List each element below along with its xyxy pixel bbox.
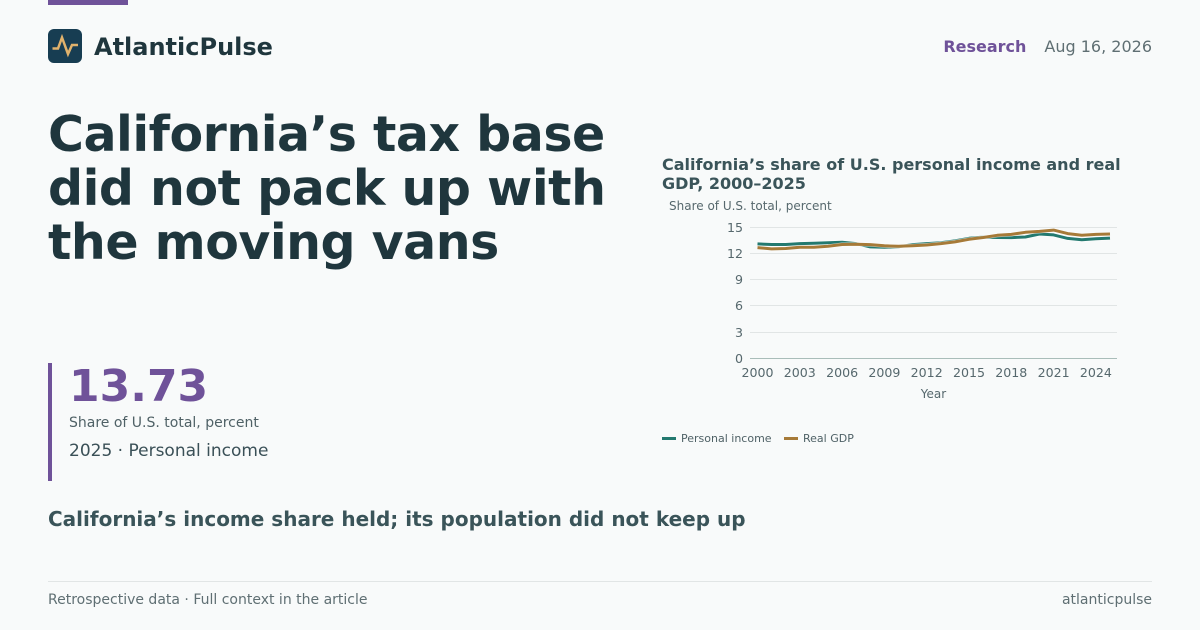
title: the moving vans bbox=[48, 214, 499, 271]
line chart bbox=[662, 199, 1117, 445]
x axis labels: 2021 bbox=[1038, 365, 1070, 380]
top accent bar bbox=[48, 0, 128, 5]
footer bbox=[48, 581, 1152, 612]
x axis labels: 2009 bbox=[868, 365, 900, 380]
line: real GDP bbox=[758, 230, 1110, 249]
chart title: GDP, 2000–2025 bbox=[662, 174, 806, 193]
x axis labels: 2012 bbox=[911, 365, 943, 380]
chart title: California’s share of U.S. personal income and real bbox=[662, 155, 1121, 174]
line: personal income bbox=[758, 234, 1110, 247]
y axis labels: 12 bbox=[727, 246, 743, 261]
x axis labels: 2006 bbox=[826, 365, 858, 380]
stat value: 13.73 bbox=[69, 361, 208, 412]
x axis labels: 2015 bbox=[953, 365, 985, 380]
y axis labels: 0 bbox=[735, 351, 743, 366]
x axis labels: 2003 bbox=[784, 365, 816, 380]
key stat callout bbox=[48, 363, 292, 481]
y axis labels: 15 bbox=[727, 220, 743, 235]
chart panel bbox=[662, 155, 1121, 445]
legend: Real GDP bbox=[803, 432, 854, 445]
stat unit: Share of U.S. total, percent bbox=[69, 415, 259, 431]
title bbox=[48, 106, 605, 271]
chart title bbox=[662, 155, 1121, 193]
legend: Personal income bbox=[681, 432, 772, 445]
x axis title: Year bbox=[920, 387, 946, 401]
brand logo and name bbox=[48, 29, 273, 63]
line chart: Share of U.S. total, percent bbox=[669, 199, 832, 213]
category and date: Research Aug 16, 2026 bbox=[943, 37, 1152, 56]
x axis labels: 2024 bbox=[1080, 365, 1112, 380]
y axis labels: 3 bbox=[735, 325, 743, 340]
brand name: AtlanticPulse bbox=[94, 33, 273, 61]
x axis labels: 2000 bbox=[741, 365, 774, 380]
stat context: 2025 · Personal income bbox=[69, 441, 268, 461]
y axis labels: 9 bbox=[735, 272, 743, 287]
y axis labels: 6 bbox=[735, 298, 743, 313]
title: did not pack up with bbox=[48, 160, 605, 217]
subheading: California’s income share held; its population did not keep up bbox=[48, 507, 746, 531]
x axis labels bbox=[741, 365, 1112, 380]
footer note: Retrospective data · Full context in the article bbox=[48, 592, 367, 608]
legend bbox=[662, 432, 854, 445]
icon: pulse logo bbox=[48, 29, 82, 63]
title: California’s tax base bbox=[48, 106, 605, 163]
footer brand: atlanticpulse bbox=[1062, 592, 1152, 608]
x axis labels: 2018 bbox=[995, 365, 1027, 380]
y axis labels bbox=[727, 220, 743, 366]
